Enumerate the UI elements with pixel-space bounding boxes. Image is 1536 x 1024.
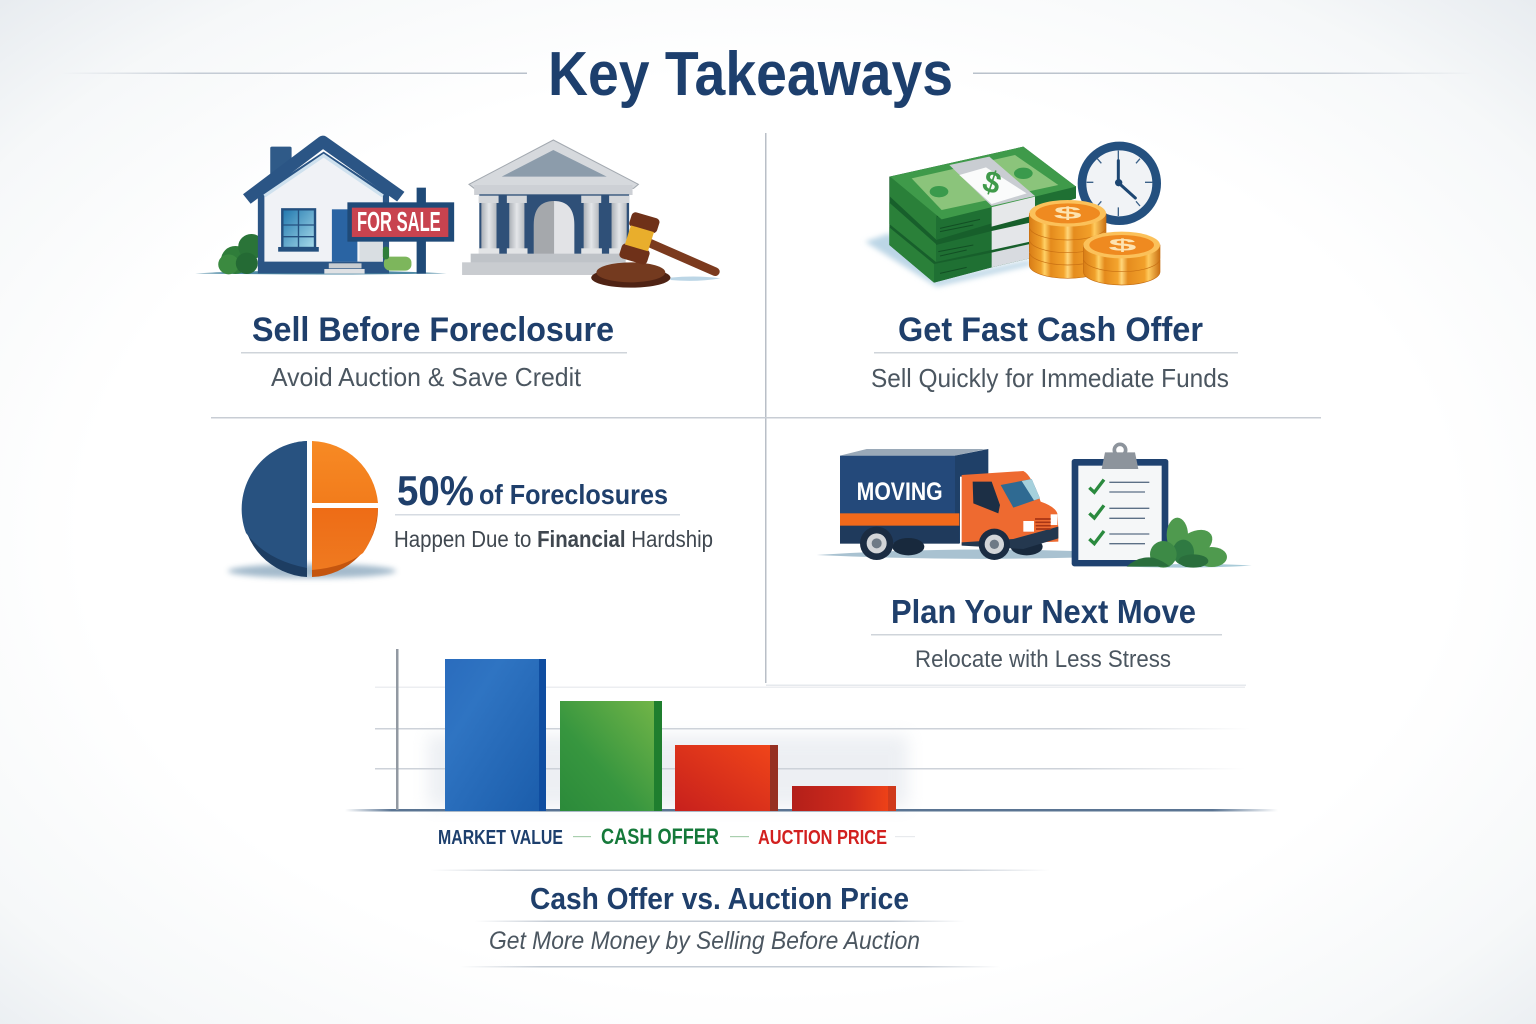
panel: cash offer vs auction price (345, 649, 1278, 968)
icon: gold coins (1029, 200, 1160, 285)
icon: gold coins: $ (1108, 235, 1139, 254)
subheading: Avoid Auction & Save Credit (271, 362, 582, 392)
bottom rule (460, 966, 1000, 968)
bar: auction price (675, 745, 778, 811)
icon: cash stack: $ (979, 164, 1005, 202)
statistic description: Happen Due to Financial Hardship (394, 526, 713, 552)
heading: Sell Before Foreclosure (252, 311, 614, 349)
statistic label: of Foreclosures (479, 479, 668, 510)
heading: Get Fast Cash Offer (898, 311, 1203, 349)
subheading: Get More Money by Selling Before Auction (489, 927, 920, 955)
heading rule (475, 920, 965, 922)
subheading: Relocate with Less Stress (915, 646, 1171, 673)
bar: lower auction price (792, 786, 896, 811)
heading: Plan Your Next Move (891, 593, 1196, 630)
panel: sell before foreclosure (195, 140, 720, 392)
legend: MARKET VALUE (438, 827, 563, 849)
panel: 50 percent statistic (228, 441, 713, 578)
icon: gavel (591, 211, 720, 288)
panel: get fast cash offer (865, 146, 1238, 393)
icon: cash, coins and clock (865, 146, 1160, 287)
statistic rule (395, 514, 680, 516)
heading: Cash Offer vs. Auction Price (530, 881, 909, 916)
title rule right (973, 72, 1475, 74)
subheading: Sell Quickly for Immediate Funds (871, 363, 1229, 393)
heading rule (874, 352, 1238, 354)
legend (438, 824, 915, 849)
heading rule (871, 634, 1222, 636)
bar chart (345, 649, 1278, 812)
pie chart (228, 441, 396, 578)
icon: moving truck (817, 449, 1073, 560)
statistic value: 50% (397, 467, 474, 514)
bar: market value (445, 659, 546, 811)
icon: moving truck and checklist (817, 444, 1252, 568)
icon: house with for sale sign, bank and gavel (195, 140, 720, 288)
title text: Key Takeaways (548, 40, 953, 109)
icon: clock (1082, 146, 1157, 221)
panel: plan your next move (817, 444, 1252, 673)
icon: moving truck: MOVING (857, 478, 943, 506)
icon: checklist clipboard (1072, 444, 1168, 566)
icon: gold coins: $ (1054, 204, 1084, 223)
icon: cash stack (865, 147, 1076, 287)
heading rule (241, 352, 627, 354)
icon: for sale sign (347, 188, 454, 274)
icon: house (195, 142, 447, 274)
legend: CASH OFFER (601, 824, 719, 849)
legend: AUCTION PRICE (758, 827, 887, 849)
icon: for sale sign: FOR SALE (357, 206, 441, 237)
icon: bush (1127, 518, 1252, 568)
bar: cash offer (560, 701, 662, 811)
title rule left (60, 72, 527, 74)
icon: bank (462, 140, 638, 275)
panel dividers (211, 133, 1321, 686)
top rule (430, 870, 1050, 871)
